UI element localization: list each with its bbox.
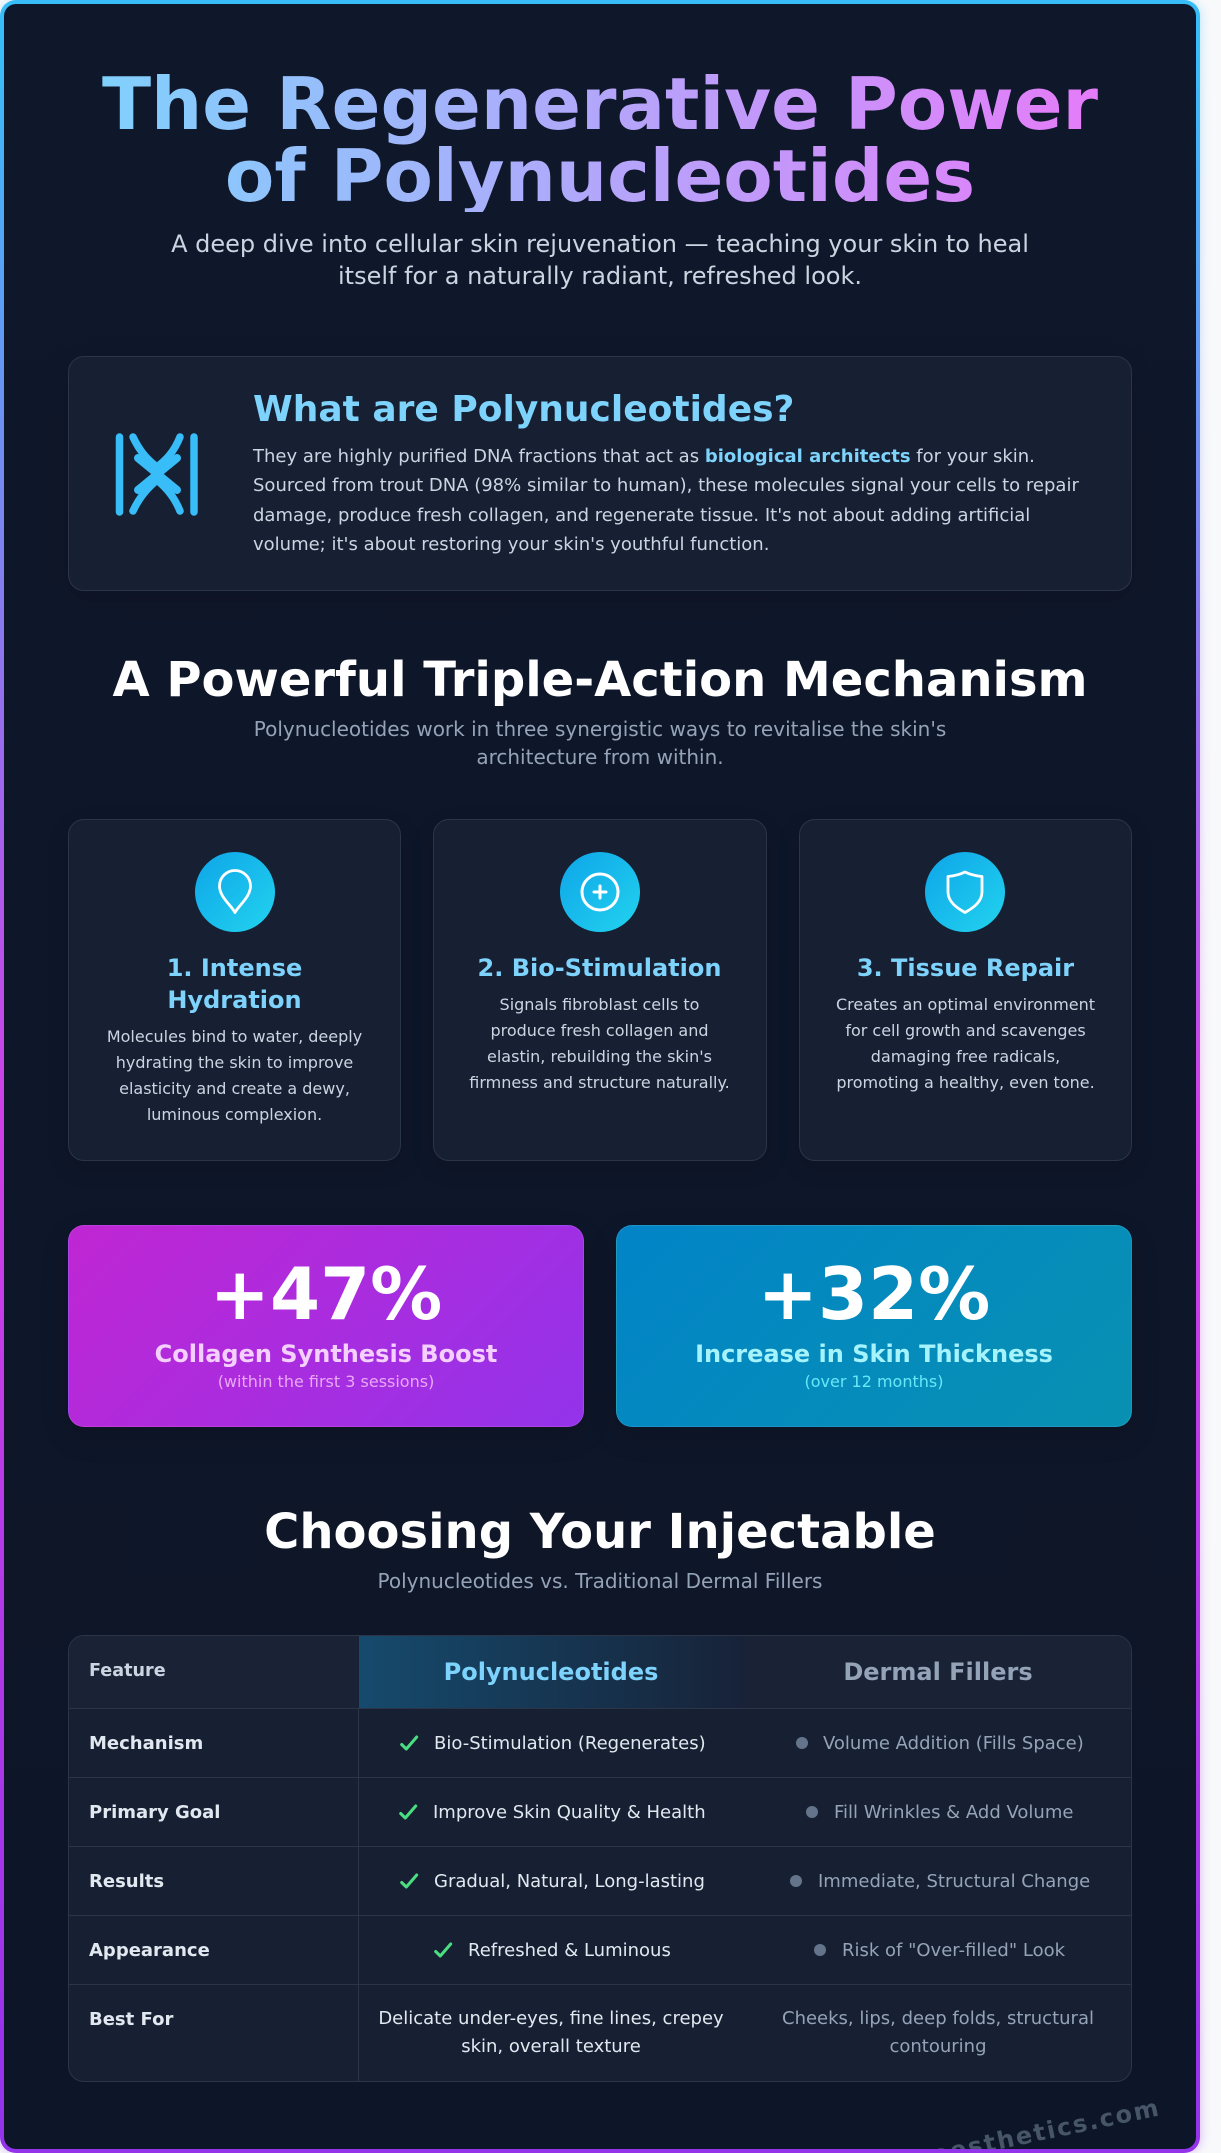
comparison table panel [68, 1635, 1132, 2082]
card text 3 [836, 995, 1095, 1092]
cell: best for polynucleotides [378, 2008, 724, 2057]
panel: bio-stimulation [433, 819, 767, 1161]
text: explanation [252, 446, 1079, 555]
card text 2: firmness and structure naturally. [469, 1073, 730, 1092]
cell: Bio-Stimulation (Regenerates) [434, 1733, 706, 1754]
heading: mechanism: A Powerful Triple-Action Mechanism [112, 652, 1088, 708]
dot [814, 1944, 826, 1956]
stat panel: collagen [68, 1225, 584, 1427]
title [68, 68, 1132, 212]
card text 2: Signals fibroblast cells to [500, 995, 699, 1014]
card title 1: Hydration [167, 986, 302, 1014]
cell: Refreshed & Luminous [468, 1940, 671, 1961]
icon: shield [925, 852, 1005, 932]
cell: best for fillers [782, 2008, 1094, 2057]
heading: what are polynucleotides: What are Polynucleotides? [253, 389, 794, 430]
text: explanation: Sourced from trout DNA (98% similar to human), these molecules signal your cells to repair [253, 475, 1079, 496]
header: dermal fillers: Dermal Fillers [843, 1658, 1033, 1686]
panel: hydration [68, 819, 401, 1161]
check [399, 1804, 418, 1820]
cell: best for polynucleotides: Delicate under-eyes, fine lines, crepey [378, 2008, 724, 2029]
heading: injectable: Choosing Your Injectable [264, 1504, 936, 1560]
card text 3: Creates an optimal environment [836, 995, 1095, 1014]
subheading: mechanism: Polynucleotides work in three synergistic ways to revitalise the skin's [254, 717, 946, 741]
text: explanation: volume; it's about restoring your skin's youthful function. [253, 534, 769, 555]
card text 3: damaging free radicals, [871, 1047, 1060, 1066]
check [400, 1735, 418, 1751]
panel: what are polynucleotides [68, 356, 1132, 591]
subtitle: A deep dive into cellular skin rejuvenation — teaching your skin to heal [171, 230, 1029, 258]
stat note: (over 12 months) [805, 1372, 943, 1391]
title: of Polynucleotides [225, 134, 975, 218]
column divider [358, 1708, 359, 2082]
stat label: Collagen Synthesis Boost [155, 1340, 497, 1368]
table header row [69, 1636, 1131, 1708]
cell: best for fillers: Cheeks, lips, deep folds, structural [782, 2008, 1094, 2029]
panel: tissue repair [799, 819, 1132, 1161]
card text 1: Molecules bind to water, deeply [107, 1027, 362, 1046]
subheading: mechanism [254, 717, 946, 769]
cell: Risk of "Over-filled" Look [842, 1940, 1065, 1961]
card text 3: for cell growth and scavenges [845, 1021, 1086, 1040]
header: polynucleotides: Polynucleotides [444, 1658, 658, 1686]
icon: drop [195, 852, 275, 932]
stat label: Increase in Skin Thickness [695, 1340, 1053, 1368]
dot [790, 1875, 802, 1887]
header: feature: Feature [89, 1661, 166, 1681]
row divider [68, 1708, 1132, 1709]
cell: Improve Skin Quality & Health [433, 1802, 706, 1823]
card text 2: elastin, rebuilding the skin's [487, 1047, 712, 1066]
icon: dna [116, 433, 198, 516]
cell: Fill Wrinkles & Add Volume [834, 1802, 1073, 1823]
stat value: +47% [210, 1252, 442, 1336]
subheading: mechanism: architecture from within. [476, 745, 724, 769]
row label: best for: Best For [89, 2009, 173, 2030]
card text 1 [107, 1027, 362, 1124]
check [400, 1873, 418, 1889]
card title 1: 1. Intense [167, 954, 302, 982]
cell: best for fillers: contouring [889, 2036, 987, 2057]
card text 1: elasticity and create a dewy, [119, 1079, 350, 1098]
row label: results: Results [89, 1871, 164, 1892]
row label: appearance: Appearance [89, 1940, 210, 1961]
cell: Volume Addition (Fills Space) [823, 1733, 1084, 1754]
subheading: injectable: Polynucleotides vs. Traditional Dermal Fillers [378, 1569, 822, 1593]
polynucleotides header cell [359, 1636, 745, 1708]
dot [796, 1737, 808, 1749]
card title 3: 3. Tissue Repair [857, 954, 1074, 982]
card text 3: promoting a healthy, even tone. [836, 1073, 1095, 1092]
text: explanation: They are highly purified DNA fractions that act as biological architects for your skin. [253, 446, 1035, 467]
icon: plus circle [560, 852, 640, 932]
card text 2: produce fresh collagen and [490, 1021, 709, 1040]
card title 1 [167, 954, 302, 1014]
title: The Regenerative Power [102, 62, 1098, 146]
stat panel: thickness [616, 1225, 1132, 1427]
card text 1: hydrating the skin to improve [116, 1053, 353, 1072]
text: explanation: damage, produce fresh collagen, and regenerate tissue. It's not about adding artificial [253, 505, 1030, 526]
stat note: (within the first 3 sessions) [218, 1372, 434, 1391]
check [434, 1942, 452, 1958]
subtitle [171, 230, 1029, 290]
dot [806, 1806, 818, 1818]
cell: Immediate, Structural Change [818, 1871, 1090, 1892]
row label: mechanism: Mechanism [89, 1733, 203, 1754]
card text 2 [469, 995, 730, 1092]
subtitle: itself for a naturally radiant, refreshed look. [338, 262, 862, 290]
stat value: +32% [758, 1252, 990, 1336]
row label: primary goal: Primary Goal [89, 1802, 220, 1823]
cell: best for polynucleotides: skin, overall texture [461, 2036, 641, 2057]
card text 1: luminous complexion. [147, 1105, 322, 1124]
card title 2: 2. Bio-Stimulation [478, 954, 721, 982]
cell: Gradual, Natural, Long-lasting [434, 1871, 705, 1892]
